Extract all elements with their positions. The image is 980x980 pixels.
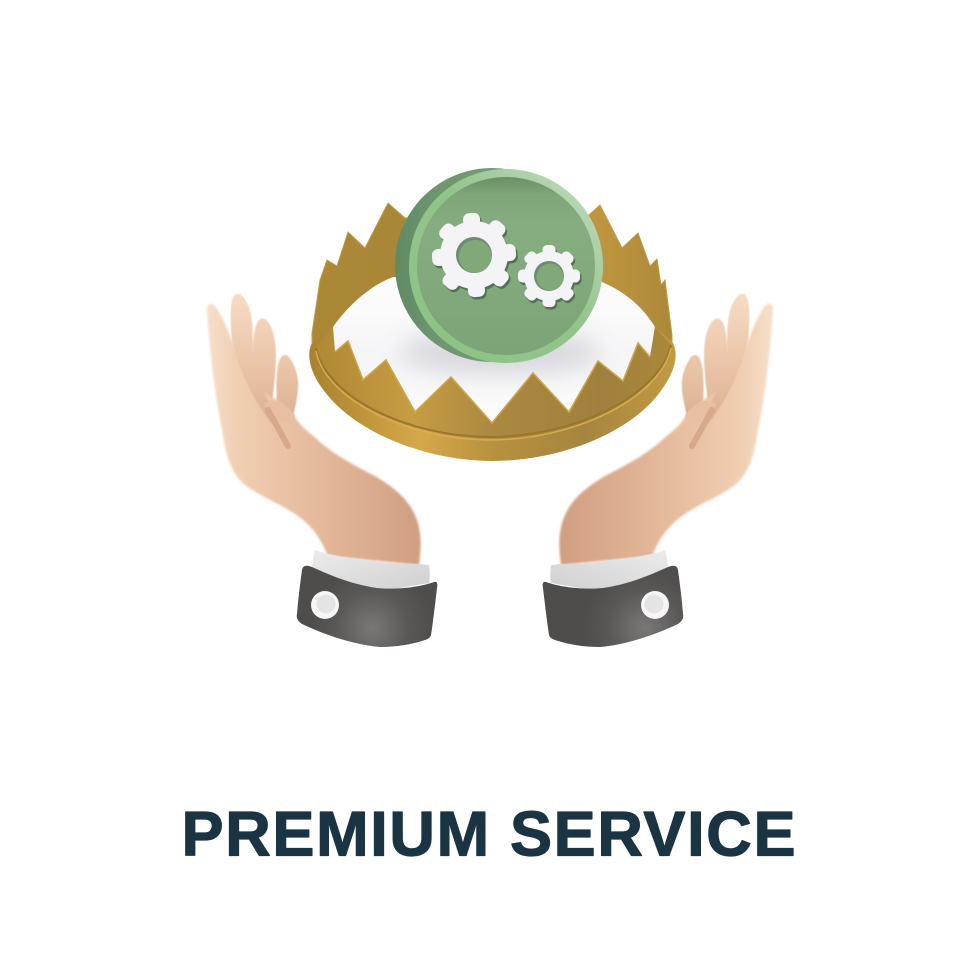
thumb [685,401,716,424]
middle finger and crease [700,294,749,424]
thumb crease [692,410,712,446]
gear coin [395,168,603,363]
white trap plate [333,277,655,423]
coin face [417,177,595,355]
icon: left hand [207,294,437,647]
crown back wall with spikes [312,203,672,350]
coin side [395,168,589,362]
thumb [264,401,295,424]
cuff button [641,591,669,619]
shirt cuff [550,550,668,592]
crown groove [316,345,671,437]
cuff button [311,591,339,619]
thumb crease [268,410,288,446]
coin rim [409,169,603,363]
icon: right hand [543,294,773,647]
palm and wrist [207,304,421,565]
sleeve cuff [297,566,437,647]
crown front inner teeth [316,327,671,437]
fingers [252,318,298,416]
crown tooth edge highlight [335,341,650,423]
icon: large gear [429,210,520,302]
middle finger and crease [231,294,280,424]
palm and wrist [559,304,773,565]
shirt cuff [312,550,430,592]
title: PREMIUM SERVICE [182,800,796,870]
icon: small gear [518,245,582,310]
icon: bear trap crown [309,168,676,461]
sleeve cuff [543,566,683,647]
fingers [682,318,728,416]
crown base rim [309,300,676,461]
disc shadow [400,330,600,374]
